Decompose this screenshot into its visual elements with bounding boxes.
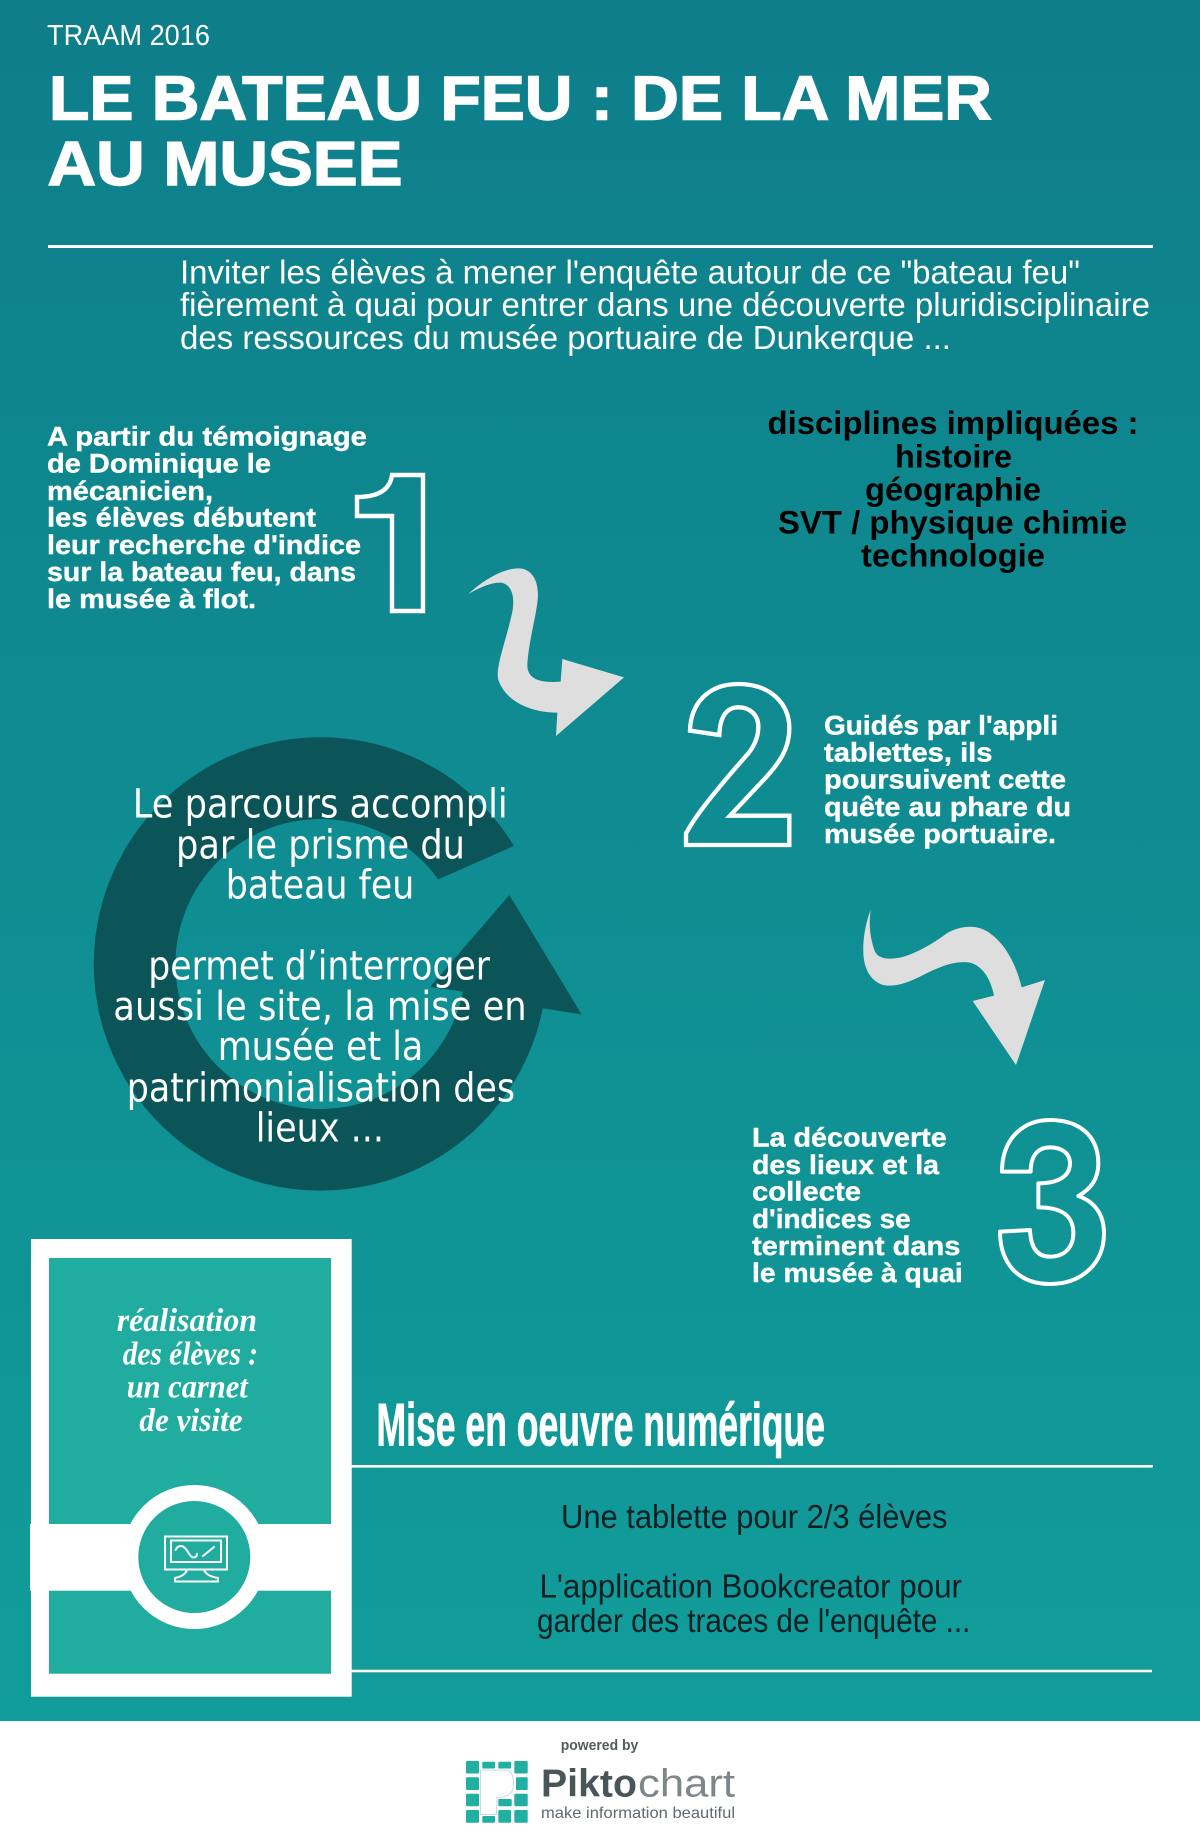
- circular arrow text: Le parcours accompli: [133, 782, 508, 828]
- card caption: [117, 1303, 258, 1439]
- circular arrow: [94, 737, 582, 1191]
- panel: footer: [0, 1721, 1200, 1841]
- arrow: step 2 to step 3: [863, 910, 1045, 1065]
- circular arrow text: permet d’interroger: [148, 943, 490, 989]
- numeral 1 outline: [357, 475, 423, 611]
- step 2 text: musée portuaire.: [824, 819, 1056, 849]
- circular arrow text: par le prisme du: [176, 822, 465, 868]
- step 3 text: le musée à quai: [752, 1258, 963, 1288]
- icon: computer screen in circle: [130, 1493, 258, 1621]
- numeral 2 outline: [686, 684, 789, 845]
- logo wordmark: Piktochart: Pikto: [541, 1763, 637, 1806]
- panel: student notebook card: [30, 1239, 352, 1697]
- step 1 text: leur recherche d'indice: [47, 530, 361, 560]
- step 3 text: [752, 1122, 963, 1288]
- circular arrow text: lieux ...: [256, 1106, 384, 1152]
- intro text block: Inviter les élèves à mener l'enquête autour de ce "bateau feu": [180, 254, 1080, 290]
- disciplines list: [768, 405, 1138, 574]
- circular arrow text: [113, 782, 527, 1152]
- logo wordmark: Piktochart: [541, 1763, 735, 1806]
- step 1 text: les élèves débutent: [47, 502, 316, 532]
- digital implementation text: L'application Bookcreator pour: [540, 1568, 962, 1604]
- intro text block: [180, 254, 1150, 356]
- disciplines list: technologie: [861, 538, 1045, 574]
- card caption: de visite: [139, 1403, 243, 1439]
- footer: powered by: powered by: [561, 1738, 638, 1754]
- step 1 text: mécanicien,: [47, 476, 213, 506]
- step 3 text: collecte: [752, 1176, 861, 1206]
- icon: Piktochart logo mark: [466, 1761, 528, 1823]
- card caption: un carnet: [127, 1370, 248, 1406]
- header label: TRAAM 2016: TRAAM 2016: [47, 20, 210, 52]
- step 3 text: d'indices se: [752, 1204, 911, 1234]
- circular arrow text: aussi le site, la mise en: [113, 984, 527, 1030]
- logo wordmark: Piktochart: chart: [638, 1763, 735, 1806]
- step 2 text: tablettes, ils: [824, 738, 992, 768]
- step 2 text: [824, 710, 1071, 849]
- step 3 text: La découverte: [752, 1122, 947, 1152]
- digital implementation text: garder des traces de l'enquête ...: [537, 1602, 970, 1639]
- step 1 text: le musée à flot.: [47, 584, 256, 614]
- intro text block: des ressources du musée portuaire de Dunkerque ...: [180, 319, 951, 356]
- step 1 text: A partir du témoignage: [47, 422, 367, 452]
- step 3 text: des lieux et la: [752, 1150, 940, 1180]
- title: AU MUSEE: [48, 130, 402, 199]
- logo tagline: make information beautiful: [541, 1805, 735, 1822]
- step 1 text: sur la bateau feu, dans: [47, 557, 356, 587]
- circular arrow text: patrimonialisation des: [127, 1066, 515, 1112]
- numeral 3 outline: [1000, 1120, 1104, 1284]
- digital implementation text: [537, 1498, 970, 1639]
- disciplines list: géographie: [865, 472, 1041, 508]
- step 1 text: de Dominique le: [47, 448, 271, 478]
- step 2 text: poursuivent cette: [824, 764, 1066, 794]
- title: LE BATEAU FEU : DE LA MER: [49, 64, 992, 134]
- title: [48, 64, 992, 199]
- step 2 text: quête au phare du: [824, 792, 1071, 822]
- disciplines list: disciplines impliquées :: [768, 405, 1138, 441]
- digital implementation text: Une tablette pour 2/3 élèves: [561, 1498, 948, 1535]
- circular arrow text: bateau feu: [226, 862, 414, 908]
- card caption: des élèves :: [123, 1336, 258, 1372]
- intro text block: fièrement à quai pour entrer dans une découverte pluridisciplinaire: [180, 286, 1150, 323]
- step 3 text: terminent dans: [752, 1231, 960, 1261]
- step 1 text: [47, 422, 367, 614]
- card caption: réalisation: [117, 1303, 257, 1339]
- step 2 text: Guidés par l'appli: [824, 710, 1058, 740]
- heading: Mise en oeuvre numérique: Mise en oeuvre numérique: [376, 1392, 825, 1458]
- arrow: step 1 to step 2: [468, 568, 624, 736]
- disciplines list: SVT / physique chimie: [778, 504, 1127, 540]
- circular arrow text: musée et la: [218, 1024, 423, 1070]
- disciplines list: histoire: [895, 438, 1012, 474]
